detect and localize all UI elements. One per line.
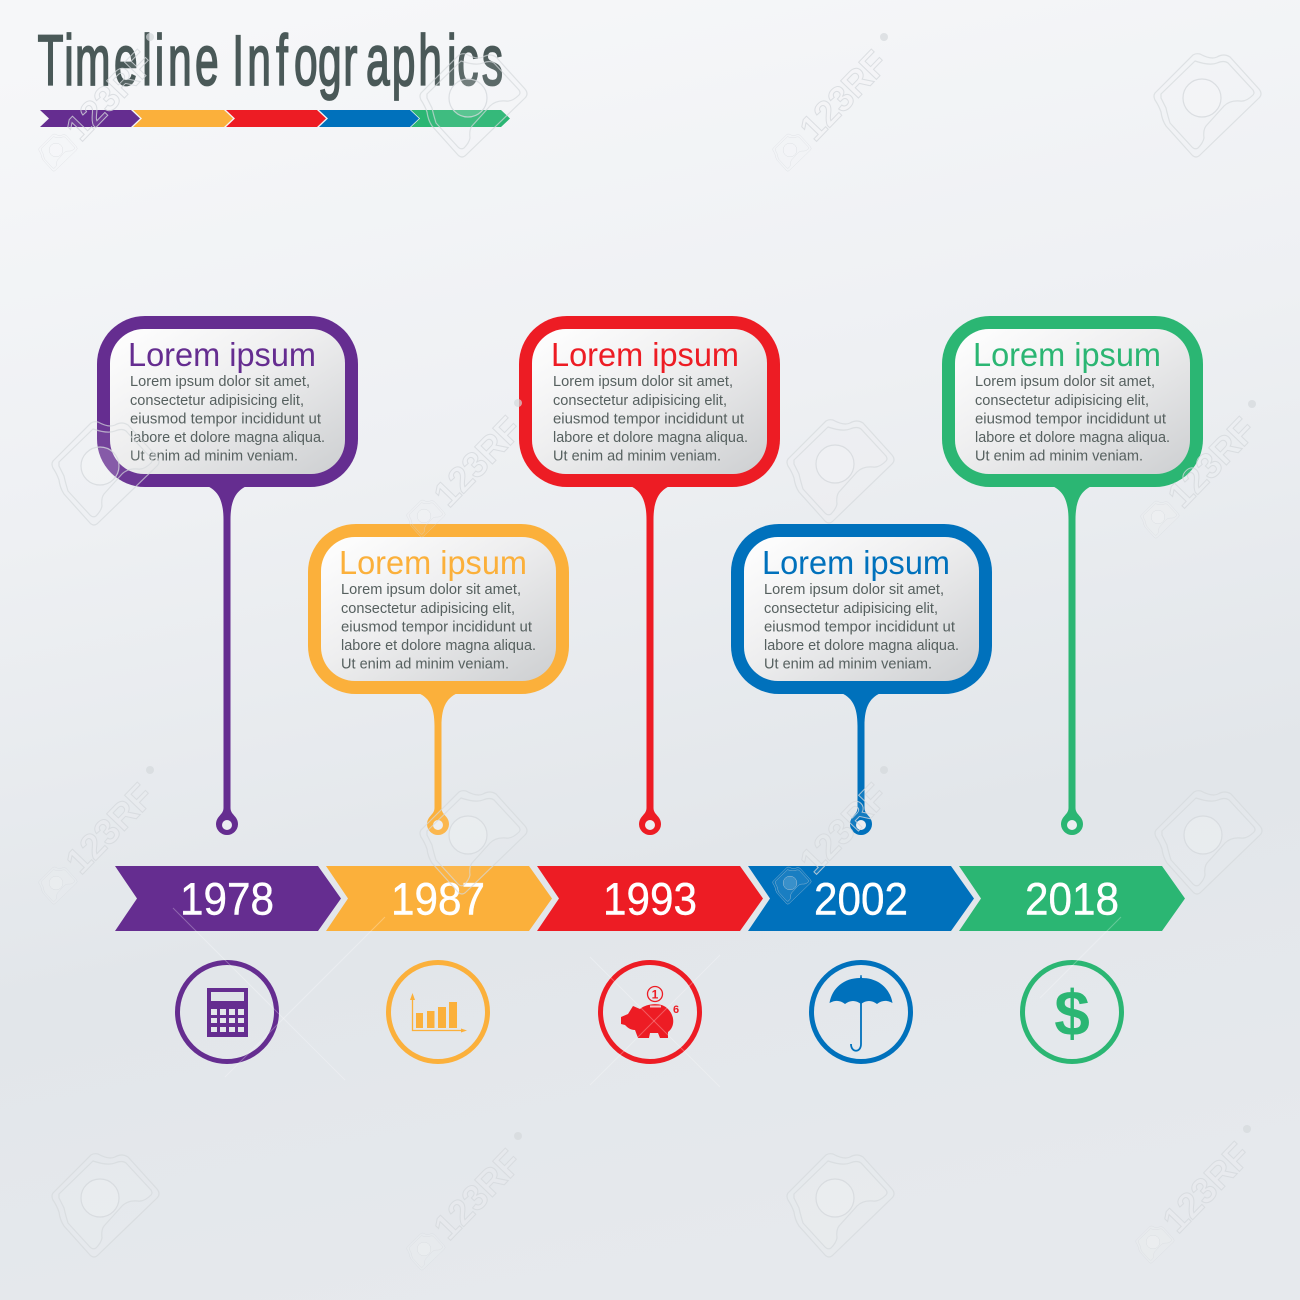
callout stem and pin bbox=[1050, 485, 1094, 835]
callout stem and pin bbox=[416, 692, 460, 835]
panel: 1978 callout bbox=[97, 316, 358, 835]
icon: piggy bank: 1 bbox=[652, 988, 659, 1002]
watermark stamps: 123RF bbox=[1154, 1134, 1259, 1241]
timeline arrow: 1987: 1987 bbox=[391, 874, 485, 924]
watermark stamps: 123RF bbox=[57, 775, 162, 882]
callout body text: Ut enim ad minim veniam. bbox=[764, 656, 932, 672]
callout body text: Lorem ipsum dolor sit amet, bbox=[341, 582, 521, 598]
callout heading: Lorem ipsum bbox=[339, 544, 527, 581]
callout stem and pin bbox=[205, 485, 249, 835]
panel: 2002 callout bbox=[731, 524, 992, 835]
callout body text: Lorem ipsum dolor sit amet, bbox=[764, 582, 944, 598]
callout body text: labore et dolore magna aliqua. bbox=[975, 430, 1170, 446]
watermark hairlines bbox=[173, 908, 1121, 1087]
watermark stamps: 123RF bbox=[425, 408, 530, 515]
callout body text: Lorem ipsum dolor sit amet, bbox=[130, 374, 310, 390]
timeline arrow: 1987 bbox=[326, 866, 552, 931]
callout heading: Lorem ipsum bbox=[762, 544, 950, 581]
watermark stamps: 123RF bbox=[1159, 409, 1264, 516]
callout body text: consectetur adipisicing elit, bbox=[553, 393, 727, 409]
callout heading: Lorem ipsum bbox=[128, 336, 316, 373]
callout body text: eiusmod tempor incididunt ut bbox=[553, 412, 744, 428]
callout body text: Ut enim ad minim veniam. bbox=[553, 448, 721, 464]
timeline arrow: 1993 bbox=[537, 866, 763, 931]
timeline arrow: 2018: 2018 bbox=[1025, 874, 1119, 924]
callout heading: Lorem ipsum bbox=[973, 336, 1161, 373]
callout body text bbox=[553, 374, 748, 464]
timeline arrow: 2002 bbox=[748, 866, 974, 931]
callout stem and pin bbox=[628, 485, 672, 835]
callout body text: labore et dolore magna aliqua. bbox=[553, 430, 748, 446]
icon: dollar bbox=[1022, 962, 1122, 1062]
callout heading: Lorem ipsum bbox=[551, 336, 739, 373]
callout body text bbox=[130, 374, 325, 464]
timeline arrow: 1978: 1978 bbox=[180, 874, 274, 924]
timeline arrow: 2018 bbox=[959, 866, 1185, 931]
callout body text: Ut enim ad minim veniam. bbox=[341, 656, 509, 672]
callout body text: labore et dolore magna aliqua. bbox=[341, 638, 536, 654]
icon: umbrella bbox=[812, 962, 910, 1062]
callout body text bbox=[341, 582, 536, 672]
callout body text: consectetur adipisicing elit, bbox=[764, 601, 938, 617]
callout body text: Ut enim ad minim veniam. bbox=[975, 448, 1143, 464]
icon: dollar: $ bbox=[1054, 977, 1090, 1049]
watermark stamps: 123RF bbox=[791, 775, 896, 882]
callout body text: eiusmod tempor incididunt ut bbox=[130, 412, 321, 428]
callout body text bbox=[764, 582, 959, 672]
panel: 1987 callout bbox=[308, 524, 569, 835]
callout body text: eiusmod tempor incididunt ut bbox=[341, 620, 532, 636]
title colour arrow bar bbox=[40, 110, 510, 127]
icon: piggy bank bbox=[600, 962, 700, 1062]
icon: piggy bank: 6 bbox=[673, 1004, 679, 1016]
callout body text: Lorem ipsum dolor sit amet, bbox=[975, 374, 1155, 390]
panel: 1993 callout bbox=[519, 316, 780, 835]
icon: bar chart bbox=[388, 962, 488, 1062]
watermark stamps: 123RF bbox=[425, 1141, 530, 1248]
callout body text: consectetur adipisicing elit, bbox=[975, 393, 1149, 409]
timeline arrow: 2002: 2002 bbox=[814, 874, 908, 924]
timeline arrow: 1993: 1993 bbox=[603, 874, 697, 924]
icon: calculator bbox=[178, 962, 276, 1062]
callout body text: labore et dolore magna aliqua. bbox=[764, 638, 959, 654]
callout body text: consectetur adipisicing elit, bbox=[341, 601, 515, 617]
callout body text: Lorem ipsum dolor sit amet, bbox=[553, 374, 733, 390]
watermark stamps: 123RF bbox=[57, 42, 162, 149]
callout stem and pin bbox=[839, 692, 883, 835]
watermark stamps: 123RF bbox=[791, 42, 896, 149]
callout body text: Ut enim ad minim veniam. bbox=[130, 448, 298, 464]
panel: 2018 callout bbox=[942, 316, 1203, 835]
title: Timeline Infographics bbox=[38, 22, 503, 101]
callout body text: labore et dolore magna aliqua. bbox=[130, 430, 325, 446]
callout body text bbox=[975, 374, 1170, 464]
callout body text: consectetur adipisicing elit, bbox=[130, 393, 304, 409]
timeline arrow: 1978 bbox=[115, 866, 341, 931]
callout body text: eiusmod tempor incididunt ut bbox=[764, 620, 955, 636]
callout body text: eiusmod tempor incididunt ut bbox=[975, 412, 1166, 428]
